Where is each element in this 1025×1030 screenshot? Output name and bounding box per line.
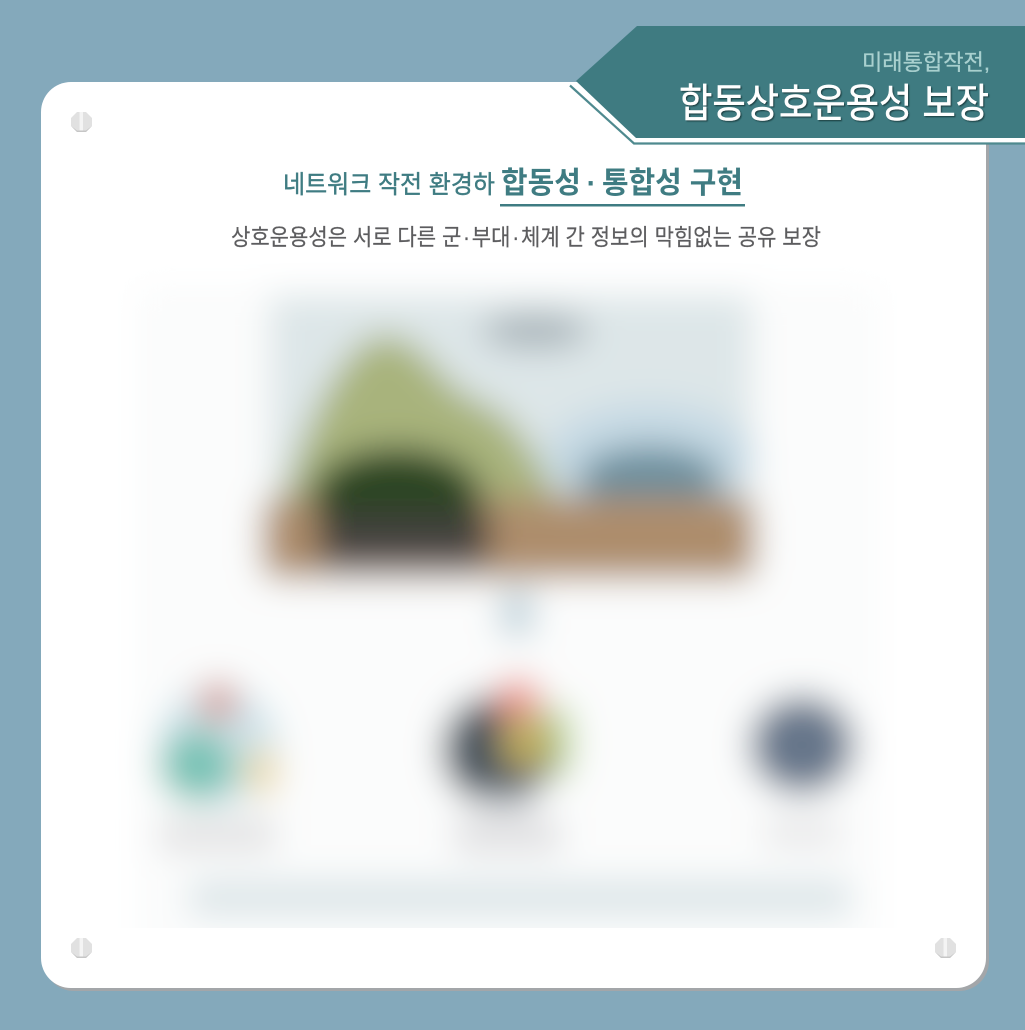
illustration: circle 3: [750, 696, 854, 794]
illustration: connector arrow: [500, 590, 534, 636]
illustration: dark forest: [311, 447, 490, 573]
illustration: circle 1: [158, 680, 280, 805]
screw: bottom left: [71, 938, 92, 958]
illustration: sign label: [481, 313, 589, 349]
illustration: ground: [262, 497, 756, 579]
heading: [283, 167, 743, 200]
illustration: captions: [160, 818, 840, 852]
banner: title ribbon: [570, 26, 1025, 144]
banner title text: 합동상호운용성 보장: [679, 82, 989, 126]
heading underline: [500, 204, 745, 206]
illustration: bottom strip: [190, 880, 850, 916]
banner kicker text: 미래통합작전,: [862, 50, 990, 75]
illustration background haze: [156, 502, 864, 800]
illustration: sky: [260, 286, 762, 496]
heading: 네트워크 작전 환경하: [283, 171, 495, 199]
screw: bottom right: [935, 938, 956, 958]
subtitle: 상호운용성은 서로 다른 군 · 부대 · 체계 간 정보의 막힘없는 공유 보장: [231, 224, 821, 250]
screw: top left: [71, 112, 92, 132]
illustration: mountain: [278, 335, 562, 512]
illustration: blue dome: [545, 403, 755, 513]
blurred illustration: [135, 285, 880, 995]
illustration: circle 2: [442, 678, 574, 807]
heading emphasis: 합동성 · 통합성 구현: [501, 167, 743, 200]
